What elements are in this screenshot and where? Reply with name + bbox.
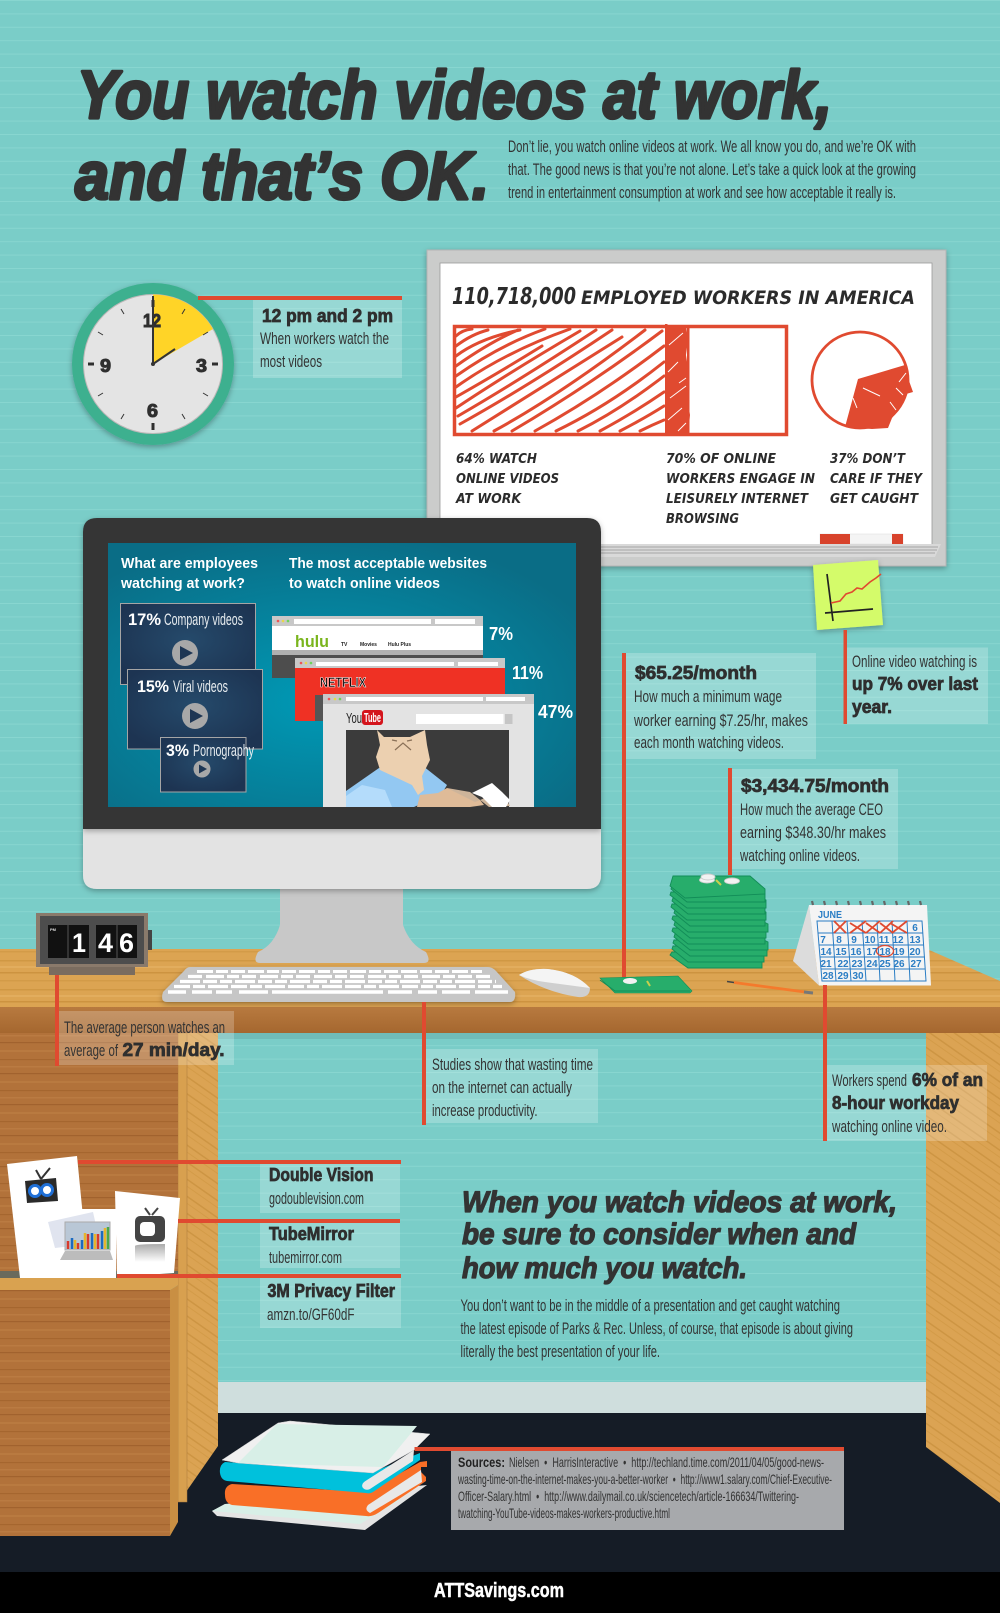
calendar dates: 25 [879,959,891,970]
calendar dates: 14 [820,947,832,958]
calendar dates [820,923,922,982]
calendar grid [817,921,926,981]
card: privacy filter laptop [39,1209,116,1278]
calendar dates: 22 [837,959,849,970]
video card: company videos: Company videos [164,610,243,629]
screen heading right [289,555,487,592]
whiteboard labels: 37% DON’T [830,451,907,467]
monitor [83,518,601,963]
right desk leg [926,1033,1000,1503]
calendar dates: 8 [836,935,842,946]
callout: 6% of workday: 6% of an [912,1070,983,1090]
whiteboard labels [455,451,923,527]
browser: hulu [272,616,483,678]
callout: 12 pm and 2 pm [198,296,402,378]
whiteboard labels: BROWSING [666,511,739,527]
title: and that’s OK. [75,138,489,214]
callout: $3,434.75/month: earning $348.30/hr makes [740,823,886,842]
calendar dates: 24 [866,959,878,970]
left cabinet [0,1033,218,1536]
calendar dates: 21 [820,959,832,970]
whiteboard labels: ONLINE VIDEOS [456,471,559,487]
video card: pornography: Pornography [193,741,254,760]
calendar dates: 9 [851,935,857,946]
callout: 27 min/day: average of [64,1041,118,1060]
browser: netflix [295,658,505,721]
calendar dates: 30 [852,971,864,982]
lower paragraph [460,1296,853,1361]
video card: company videos: 17% [128,610,161,629]
sketched pie chart [812,332,913,429]
callout: 12 pm and 2 pm: 12 pm and 2 pm [262,306,393,326]
calendar dates: 13 [909,935,921,946]
browser: youtube: Tube [364,710,381,725]
screen heading left: What are employees [121,555,258,572]
calendar crossed days [834,921,907,933]
calendar dates: 23 [851,959,863,970]
sources: twatching-YouTube-videos-makes-workers-productive.html [458,1505,670,1521]
calendar dates: 15 [835,947,847,958]
link: tubemirror: tubemirror.com [269,1248,342,1267]
browser: hulu: Movies [360,642,377,648]
callout: productivity: increase productivity. [432,1101,538,1120]
callout: 6% of workday: Workers spend [832,1071,907,1090]
callout: 27 min/day [55,975,234,1066]
calendar dates: 28 [822,971,834,982]
book stack [212,1421,430,1530]
lower heading: be sure to consider when and [462,1218,857,1251]
video card: pornography [160,738,254,792]
carpet floor [0,1413,1000,1572]
callout: 27 min/day: 27 min/day. [122,1040,224,1060]
whiteboard heading [452,284,915,310]
whiteboard labels: WORKERS ENGAGE IN [666,471,816,487]
screen [108,543,576,807]
link: double vision: godoublevision.com [269,1189,364,1208]
lower heading: how much you watch. [462,1252,747,1285]
whiteboard heading: EMPLOYED WORKERS IN AMERICA [581,287,915,309]
flip clock: 4 [98,928,113,958]
calendar: JUNE [818,910,842,921]
card: double vision logo [7,1156,89,1278]
whiteboard labels: LEISURELY INTERNET [666,491,810,507]
sticky note [813,560,883,630]
marker tray [601,534,941,557]
callout: up 7% [844,630,988,724]
link: 3M privacy filter: 3M Privacy Filter [268,1281,395,1301]
money stack [670,874,768,968]
browser: hulu: hulu [295,632,329,651]
browser: youtube [323,694,534,807]
flip clock: PM [50,927,57,932]
link: 3M privacy filter: amzn.to/GF60dF [267,1305,354,1324]
callout: up 7%: year. [852,697,892,717]
keyboard [162,967,515,1002]
keyboard cat picture [346,730,510,807]
clock [72,283,234,445]
callout: 6% of workday: watching online video. [831,1117,947,1136]
calendar dates: 12 [892,935,904,946]
baseboard [218,1382,926,1413]
screen heading left: watching at work? [120,575,245,592]
whiteboard panel [427,250,946,566]
sources: Sources: [458,1454,505,1470]
callout: $65.25/month: $65.25/month [635,663,757,683]
whiteboard labels: GET CAUGHT [830,491,920,507]
callout: productivity: on the internet can actually [432,1078,572,1097]
calendar dates: 7 [820,935,826,946]
calendar dates: 17 [866,947,878,958]
callout: $3,434.75/month: watching online videos. [739,846,860,865]
title [75,57,832,214]
video card: viral videos: 15% [137,677,169,696]
callout: productivity: Studies show that wasting time [432,1055,593,1074]
flip clock: 6 [119,928,134,958]
callout: $3,434.75/month: $3,434.75/month [741,776,889,796]
callout: 12 pm and 2 pm: When workers watch the [260,329,389,348]
calendar dates: 19 [893,947,905,958]
callout: $65.25/month: each month watching videos. [634,733,784,752]
callout: 27 min/day: The average person watches an [64,1018,225,1037]
mouse [519,969,590,997]
whiteboard labels: 64% WATCH [456,451,538,467]
callout: 6% of workday: 8-hour workday [832,1093,959,1113]
sketched bar chart [454,324,786,436]
clock: 9 [100,356,111,376]
calendar dates: 11 [879,935,890,946]
clock: 3 [196,356,207,376]
whiteboard labels: 70% OF ONLINE [666,451,777,467]
video card: viral videos [128,670,262,749]
lower paragraph: literally the best presentation of your life. [460,1342,660,1361]
calendar dates: 27 [910,959,922,970]
calendar dates: 29 [837,971,849,982]
browser: netflix: NETFLIX [320,674,367,690]
calendar dates: 20 [909,947,921,958]
clock: 12 [143,311,161,331]
screen heading right: The most acceptable websites [289,555,487,572]
link: double vision: Double Vision [269,1165,374,1185]
under-desk shadow [218,1033,926,1039]
whiteboard heading: 110,718,000 [452,284,576,310]
label: hulu 7%: 7% [489,624,513,644]
sources: Officer-Salary.html • http://www.dailymail.co.uk/sciencetech/article-166634/Twittering- [458,1488,799,1504]
pencil [727,982,813,993]
intro text [508,137,916,202]
link: 3M privacy filter [117,1274,401,1328]
sources [414,1447,844,1530]
calendar [793,901,931,986]
browser: hulu: TV [341,642,348,648]
calendar dates: 16 [850,947,862,958]
lower heading: When you watch videos at work, [462,1186,897,1219]
footer bar [0,1572,1000,1613]
flip clock [36,913,152,975]
callout: 12 pm and 2 pm: most videos [260,352,322,371]
whiteboard labels: AT WORK [455,491,522,507]
whiteboard labels: CARE IF THEY [830,471,923,487]
calendar dates: 6 [912,923,918,934]
callout: 6% of workday [823,985,987,1141]
callout: productivity [422,1002,598,1125]
video card: pornography: 3% [166,741,189,760]
small money pile [600,976,692,993]
callout: $3,434.75/month: How much the average CEO [740,800,883,819]
monitor stand [255,885,429,963]
link: tubemirror [178,1219,400,1268]
label: youtube 47%: 47% [538,702,573,722]
label: netflix 11%: 11% [512,663,543,683]
card: tubemirror logo [115,1191,180,1277]
screen heading left [120,555,258,592]
calendar dates: 18 [879,947,891,958]
callout: $3,434.75/month [728,768,898,875]
title: You watch videos at work, [77,57,832,133]
link: double vision [78,1160,401,1213]
calendar dates: 26 [893,959,905,970]
link: tubemirror: TubeMirror [269,1224,354,1244]
sources: Nielsen • HarrisInteractive • http://techland.time.com/2011/04/05/good-news- [509,1454,824,1470]
video card: company videos [120,604,256,684]
video card: viral videos: Viral videos [173,677,228,696]
calendar dates: 10 [864,935,876,946]
desk [0,949,1000,1033]
browser: hulu: Hulu Plus [388,642,411,648]
callout: $65.25/month: worker earning $7.25/hr, makes [633,711,808,730]
lower heading [462,1186,897,1285]
clock: 6 [147,401,158,421]
callout: $65.25/month [622,653,816,977]
browser: youtube: You [346,710,362,727]
callout: up 7%: up 7% over last [852,674,978,694]
screen heading right: to watch online videos [289,575,440,592]
drawer lip [0,1278,178,1290]
callout: $65.25/month: How much a minimum wage [634,687,782,706]
flip clock: 1 [72,928,86,958]
monitor body [83,829,601,889]
footer bar: ATTSavings.com [434,1580,564,1602]
